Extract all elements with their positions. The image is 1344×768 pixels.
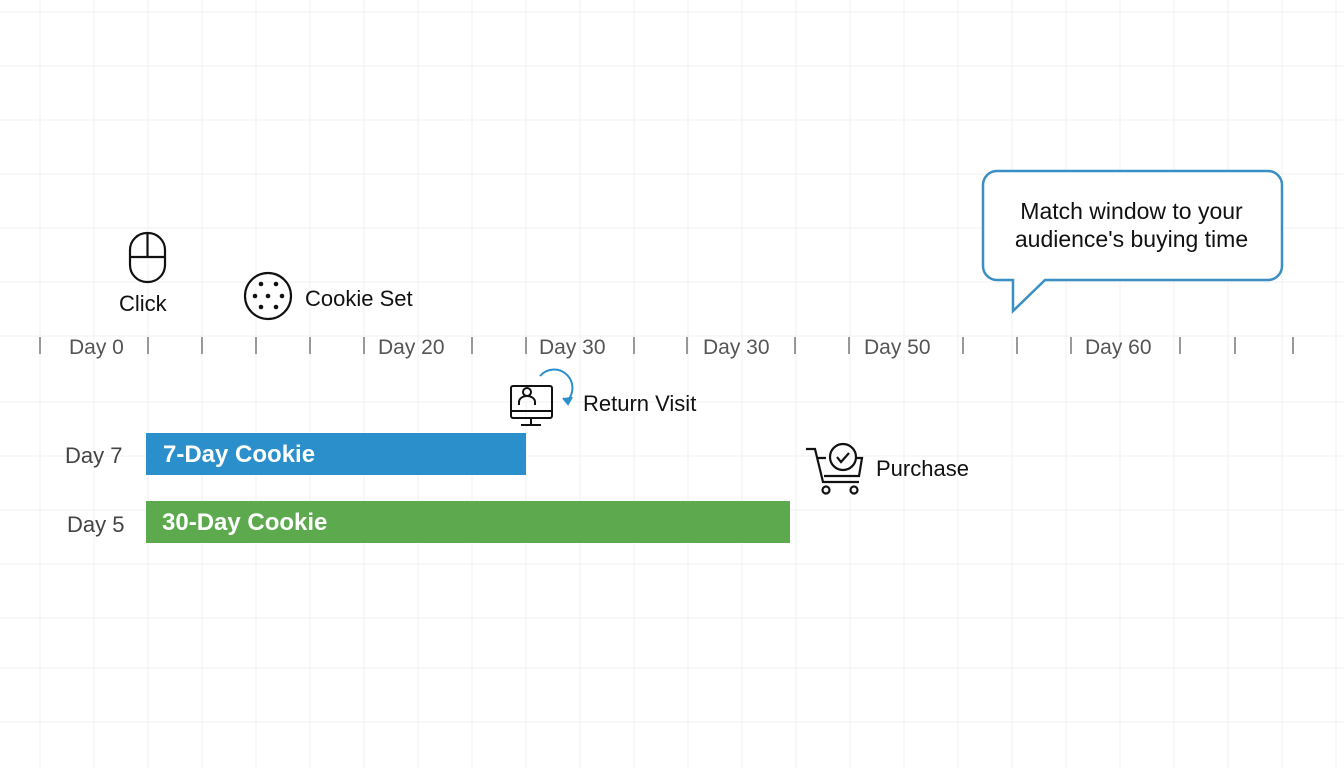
callout text: Match window to your — [1020, 198, 1243, 224]
callout text — [1015, 198, 1248, 252]
7-day bar text: 7-Day Cookie — [163, 441, 315, 468]
icon: monitor return — [511, 370, 572, 425]
axis labels: Day 0 — [69, 336, 124, 359]
axis labels — [69, 336, 1152, 359]
axis labels: Day 60 — [1085, 336, 1152, 359]
icon: cookie — [245, 273, 291, 319]
Day 7 label: Day 7 — [65, 443, 122, 468]
Cookie Set label: Cookie Set — [305, 286, 413, 311]
Day 5 label: Day 5 — [67, 512, 124, 537]
callout text: audience's buying time — [1015, 226, 1248, 252]
Click label: Click — [119, 291, 167, 316]
axis labels: Day 30 — [703, 336, 770, 359]
icon: mouse — [130, 233, 165, 282]
Purchase label: Purchase — [876, 456, 969, 481]
axis ticks — [40, 337, 1293, 354]
callout — [983, 171, 1282, 311]
Return Visit label: Return Visit — [583, 391, 696, 416]
axis labels: Day 50 — [864, 336, 931, 359]
axis labels: Day 20 — [378, 336, 445, 359]
30-day bar text: 30-Day Cookie — [162, 509, 327, 536]
axis labels: Day 30 — [539, 336, 606, 359]
icon: cart — [806, 444, 862, 494]
bars — [146, 433, 526, 475]
